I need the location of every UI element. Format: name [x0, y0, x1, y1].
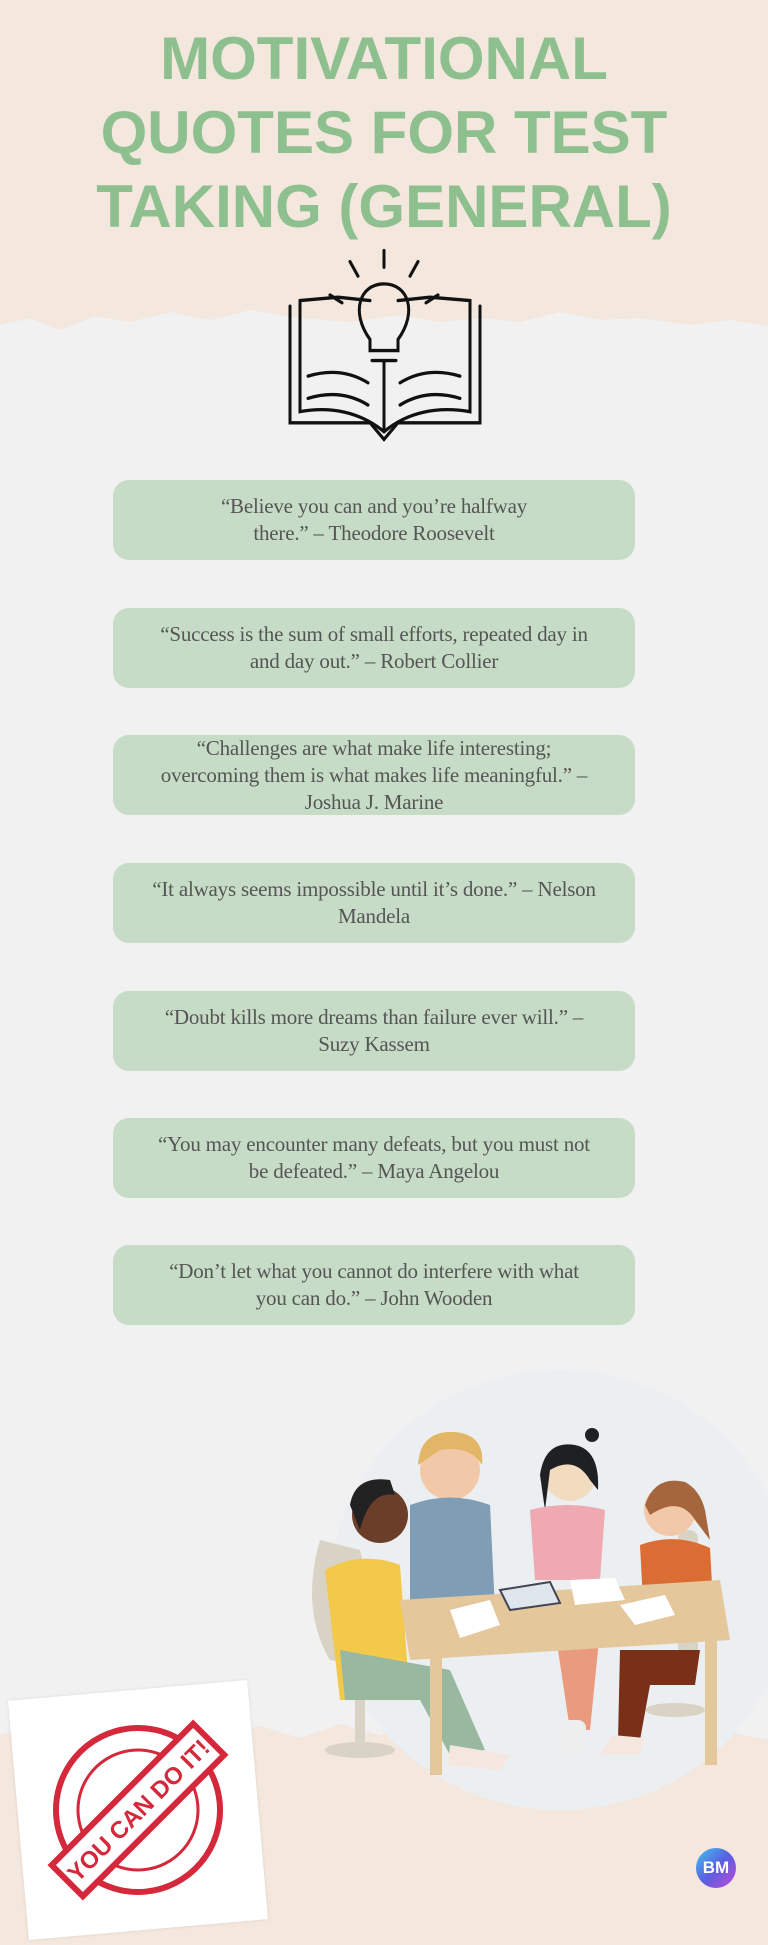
quote 7: [113, 1245, 635, 1325]
stamp card: YOU CAN DO IT!: YOU CAN DO IT!: [63, 1735, 216, 1888]
quote 6: be defeated.” – Maya Angelou: [249, 1159, 499, 1183]
quote 3: Joshua J. Marine: [305, 790, 443, 814]
quote 2: and day out.” – Robert Collier: [250, 649, 498, 673]
title: [96, 25, 672, 240]
quote 4: “It always seems impossible until it’s done.” – Nelson: [152, 877, 596, 901]
stamp card: YOU CAN DO IT!: [8, 1680, 268, 1940]
logo: BM: BM: [703, 1858, 729, 1877]
quote 5: “Doubt kills more dreams than failure ever will.” –: [165, 1005, 583, 1029]
quote 5: [113, 991, 635, 1071]
icon: book with lightbulb: [288, 248, 482, 442]
quote 3: overcoming them is what makes life meaningful.” –: [161, 763, 587, 787]
quote 6: “You may encounter many defeats, but you must not: [158, 1132, 590, 1156]
quote 2: “Success is the sum of small efforts, repeated day in: [160, 622, 588, 646]
quote 2: [113, 608, 635, 688]
quote 3: “Challenges are what make life interesting;: [197, 736, 551, 760]
quote 1: [113, 480, 635, 560]
quote 1: “Believe you can and you’re halfway: [221, 494, 527, 518]
quote 7: “Don’t let what you cannot do interfere with what: [169, 1259, 579, 1283]
quote 4: [113, 863, 635, 943]
quote 6: [113, 1118, 635, 1198]
quote 5: Suzy Kassem: [318, 1032, 430, 1056]
quote 1: there.” – Theodore Roosevelt: [253, 521, 495, 545]
title: TAKING (GENERAL): [96, 173, 672, 240]
quote 4: Mandela: [338, 904, 410, 928]
illustration: students at table: [312, 1428, 730, 1775]
logo: BM: [696, 1848, 736, 1888]
title: MOTIVATIONAL: [160, 25, 608, 92]
quote 3: [113, 735, 635, 815]
title: QUOTES FOR TEST: [101, 99, 667, 166]
quote 7: you can do.” – John Wooden: [256, 1286, 492, 1310]
